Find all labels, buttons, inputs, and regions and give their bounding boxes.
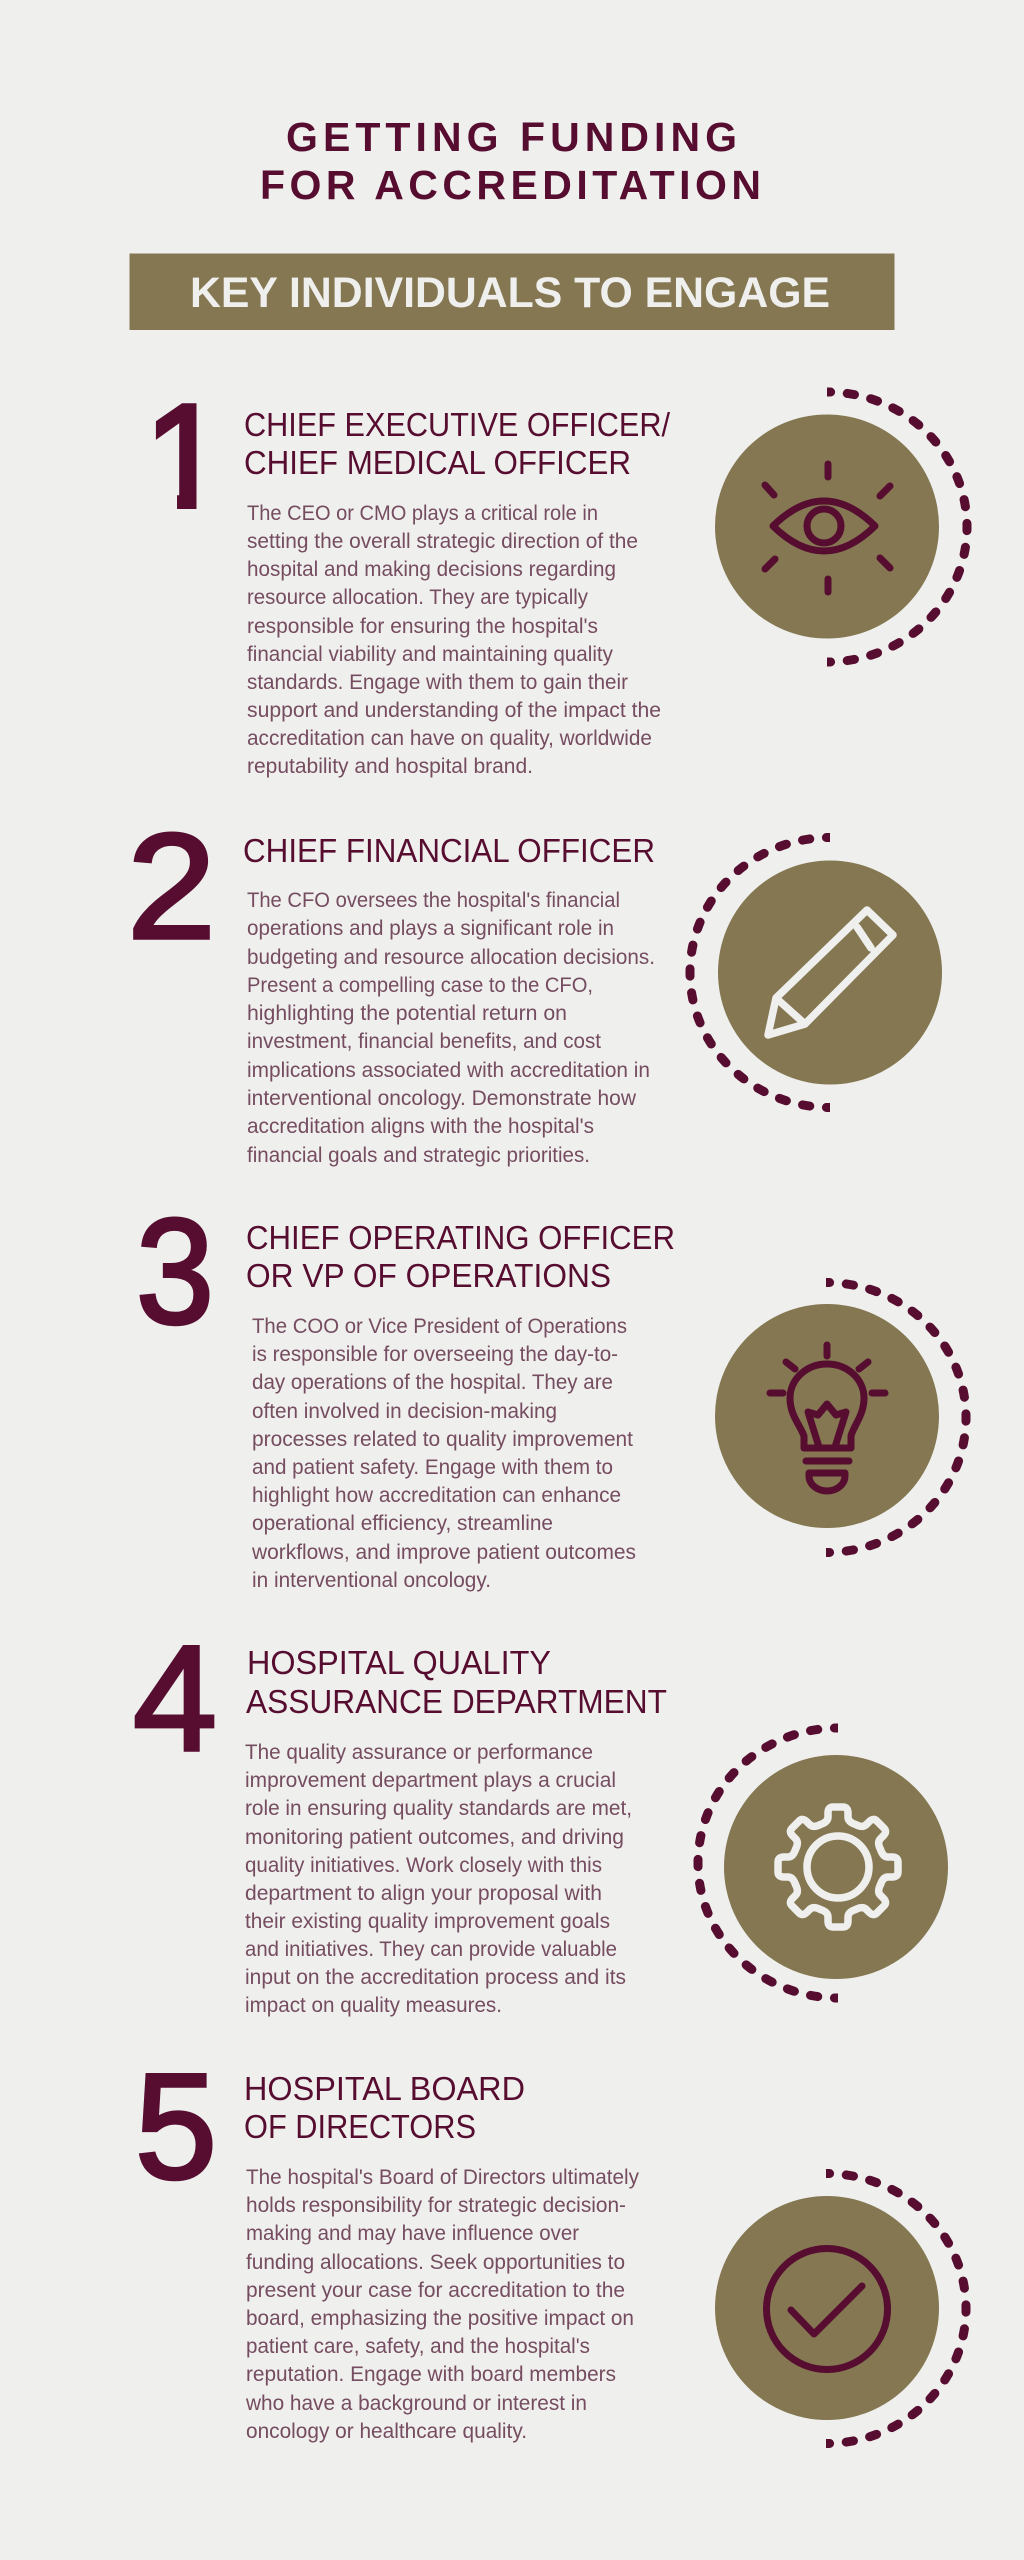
- heading: board of directors: [244, 2070, 525, 2145]
- body text: CFO: accreditation aligns with the hospital's: [247, 1115, 594, 1138]
- body text: board of directors: The hospital's Board of Directors ultimately: [246, 2166, 639, 2189]
- heading: COO: [246, 1219, 675, 1294]
- heading: COO: OR VP OF OPERATIONS: [246, 1257, 611, 1294]
- body text: CFO: highlighting the potential return on: [247, 1002, 567, 1025]
- body text: board of directors: making and may have influence over: [246, 2222, 579, 2245]
- body text: CFO: [247, 889, 655, 1167]
- heading: quality assurance: HOSPITAL QUALITY: [247, 1644, 551, 1681]
- number 2: 2: [127, 802, 216, 970]
- body text: board of directors: who have a background or interest in: [245, 2392, 587, 2415]
- heading: quality assurance: ASSURANCE DEPARTMENT: [246, 1683, 667, 1720]
- icon: eye in circle: [715, 392, 967, 662]
- body text: quality assurance: improvement department plays a crucial: [245, 1769, 616, 1792]
- body text: quality assurance: monitoring patient outcomes, and driving: [245, 1826, 624, 1849]
- heading: board of directors: HOSPITAL BOARD: [244, 2070, 525, 2107]
- body text: CFO: interventional oncology. Demonstrate how: [247, 1087, 637, 1110]
- panel: chief executive officer: [144, 373, 967, 778]
- body text: CEO: support and understanding of the impact the: [247, 699, 661, 722]
- body text: CFO: implications associated with accreditation in: [247, 1059, 650, 1082]
- body text: CFO: Present a compelling case to the CFO,: [247, 974, 593, 997]
- body text: quality assurance: role in ensuring quality standards are met,: [245, 1797, 632, 1820]
- body text: COO: workflows, and improve patient outcomes: [251, 1541, 636, 1564]
- heading: board of directors: OF DIRECTORS: [244, 2108, 476, 2145]
- icon: check mark in circle: [715, 2174, 966, 2444]
- heading: CEO / CMO: [244, 406, 671, 481]
- body text: CEO: setting the overall strategic direction of the: [247, 530, 638, 553]
- body text: quality assurance: impact on quality measures.: [245, 1994, 502, 2017]
- body text: quality assurance: quality initiatives. Work closely with this: [245, 1854, 602, 1877]
- body text: COO: often involved in decision-making: [252, 1400, 557, 1423]
- body text: quality assurance: and initiatives. They can provide valuable: [245, 1938, 617, 1961]
- number 4: 4: [133, 1614, 217, 1782]
- body text: CFO: financial goals and strategic priorities.: [247, 1144, 590, 1167]
- body text: COO: day operations of the hospital. They are: [252, 1371, 613, 1394]
- infographic canvas: [130, 122, 972, 2448]
- body text: COO: operational efficiency, streamline: [252, 1512, 553, 1535]
- icon: gear in circle: [698, 1728, 948, 1998]
- panel: hospital board of directors: [135, 2042, 966, 2444]
- body text: CEO: resource allocation. They are typically: [247, 586, 588, 609]
- heading: quality assurance: [246, 1644, 667, 1720]
- body text: board of directors: present your case for accreditation to the: [246, 2279, 625, 2302]
- title: [260, 114, 761, 208]
- body text: CEO: accreditation can have on quality, worldwide: [247, 727, 652, 750]
- body text: CEO: The CEO or CMO plays a critical role in: [247, 502, 598, 525]
- icon: pencil in circle: [690, 838, 942, 1108]
- body text: COO: and patient safety. Engage with them to: [252, 1456, 613, 1479]
- body text: quality assurance: department to align your proposal with: [245, 1882, 602, 1905]
- title: GETTING FUNDING: [286, 114, 737, 160]
- title: FOR ACCREDITATION: [260, 162, 761, 208]
- number 5: 5: [135, 2042, 217, 2210]
- number 1: 1: [144, 373, 227, 541]
- body text: quality assurance: their existing quality improvement goals: [245, 1910, 610, 1933]
- body text: COO: is responsible for overseeing the day-to-: [252, 1343, 618, 1366]
- panel: chief financial officer: [127, 802, 942, 1167]
- body text: board of directors: funding allocations. Seek opportunities to: [246, 2251, 625, 2274]
- body text: CFO: budgeting and resource allocation decisions.: [247, 946, 655, 969]
- body text: CFO: investment, financial benefits, and cost: [247, 1030, 601, 1053]
- body text: board of directors: board, emphasizing the positive impact on: [246, 2307, 634, 2330]
- body text: quality assurance: The quality assurance or performance: [245, 1741, 593, 1764]
- body text: CFO: The CFO oversees the hospital's financial: [247, 889, 620, 912]
- body text: board of directors: holds responsibility for strategic decision-: [246, 2194, 626, 2217]
- banner: key individuals: [130, 254, 894, 330]
- body text: COO: [251, 1315, 636, 1592]
- banner: key individuals: KEY INDIVIDUALS TO ENGAGE: [190, 269, 830, 317]
- body text: board of directors: patient care, safety, and the hospital's: [246, 2335, 590, 2358]
- body text: CEO: financial viability and maintaining quality: [247, 643, 613, 666]
- heading: CEO / CMO: CHIEF EXECUTIVE OFFICER/: [244, 406, 671, 443]
- body text: COO: The COO or Vice President of Operations: [252, 1315, 627, 1338]
- body text: CFO: operations and plays a significant role in: [247, 917, 614, 940]
- body text: CEO: responsible for ensuring the hospital's: [247, 615, 598, 638]
- body text: COO: highlight how accreditation can enhance: [252, 1484, 621, 1507]
- heading: CFO: CHIEF FINANCIAL OFFICER: [243, 832, 655, 869]
- number 3: 3: [136, 1187, 214, 1355]
- heading: COO: CHIEF OPERATING OFFICER: [246, 1219, 675, 1256]
- body text: board of directors: oncology or healthcare quality.: [246, 2420, 527, 2443]
- body text: quality assurance: [245, 1741, 632, 2017]
- body text: COO: processes related to quality improvement: [252, 1428, 633, 1451]
- body text: CEO: [247, 502, 661, 778]
- panel: chief operating officer: [136, 1187, 966, 1592]
- body text: board of directors: reputation. Engage with board members: [246, 2363, 616, 2386]
- body text: COO: in interventional oncology.: [252, 1569, 491, 1592]
- body text: CEO: hospital and making decisions regarding: [247, 558, 616, 581]
- body text: quality assurance: input on the accreditation process and its: [245, 1966, 626, 1989]
- body text: CEO: standards. Engage with them to gain their: [247, 671, 628, 694]
- body text: CEO: reputability and hospital brand.: [247, 755, 533, 778]
- icon: light bulb in circle: [715, 1282, 966, 1552]
- panel: hospital quality assurance: [133, 1614, 948, 2017]
- body text: board of directors: [245, 2166, 639, 2443]
- heading: CEO / CMO: CHIEF MEDICAL OFFICER: [244, 444, 631, 481]
